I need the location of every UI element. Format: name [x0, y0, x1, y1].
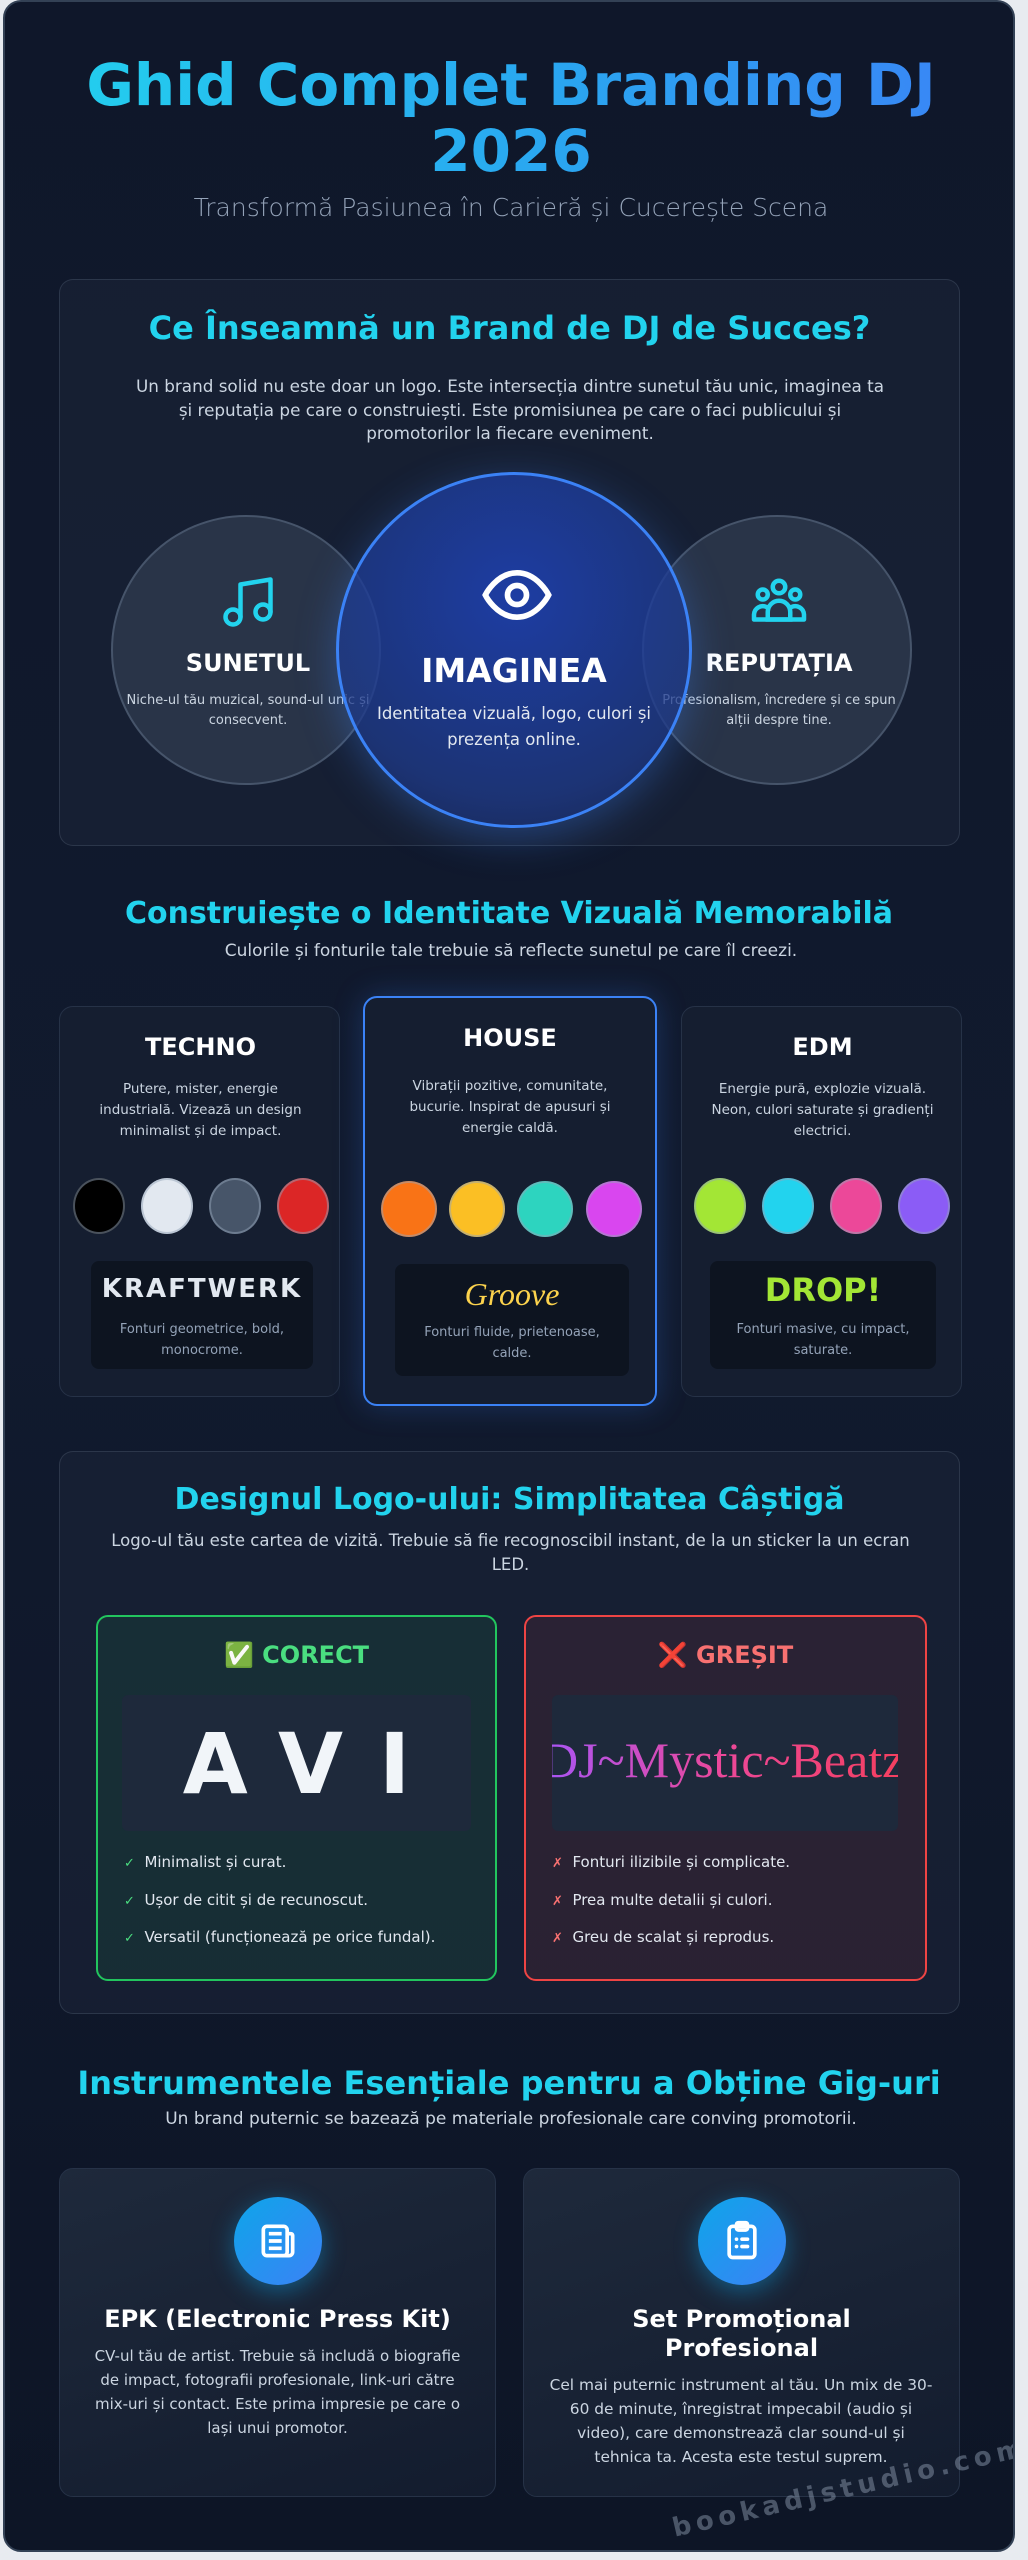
- heading: tools: Instrumentele Esențiale pentru a Obține Gig-uri: [77, 2064, 941, 2102]
- card: techno: TECHNO: [145, 1033, 256, 1061]
- circle: imaginea: [336, 472, 692, 828]
- card: house: HOUSE: [463, 1024, 557, 1052]
- font sample: DROP!: [765, 1271, 881, 1309]
- card: techno: [59, 1006, 340, 1397]
- panel: logo design: [59, 1451, 960, 2014]
- list: ✓ Ușor de citit și de recunoscut.: [124, 1891, 368, 1909]
- subheading: Logo-ul tău este cartea de vizită. Trebuie să fie recognoscibil instant, de la un sticker la un ecran LED.: [111, 1531, 910, 1574]
- font sample: [395, 1264, 629, 1376]
- icon: eye: [482, 570, 552, 620]
- font sample: [710, 1261, 936, 1369]
- list: ✓ Minimalist și curat.: [124, 1853, 286, 1871]
- icon: people: [752, 578, 806, 622]
- card: house: Vibrații pozitive, comunitate, bucurie. Inspirat de apusuri și energie caldă.: [409, 1078, 611, 1136]
- logo sample: messy: [552, 1695, 898, 1831]
- box: correct: ✅ CORECT: [224, 1641, 369, 1669]
- list: [552, 1853, 790, 1946]
- title: [5, 52, 1017, 184]
- logo sample: AVI: [122, 1695, 471, 1831]
- list: ✗ Fonturi ilizibile și complicate.: [552, 1853, 790, 1871]
- circle: imaginea: Identitatea vizuală, logo, culori și prezența online.: [377, 704, 651, 749]
- circle: reputatia: REPUTAȚIA: [705, 649, 853, 677]
- circle: imaginea: IMAGINEA: [421, 651, 607, 690]
- icon: music note: [223, 577, 273, 627]
- card: EPK: EPK (Electronic Press Kit): [104, 2305, 451, 2333]
- subtitle: Transformă Pasiunea în Carieră și Cucerește Scena: [194, 193, 828, 222]
- box: wrong: [524, 1615, 927, 1981]
- font sample: Fonturi geometrice, bold, monocrome.: [120, 1322, 284, 1358]
- swatches: [694, 1178, 950, 1234]
- circle: sunetul: [111, 515, 381, 785]
- icon: clipboard: [698, 2197, 786, 2285]
- card: promo set: [523, 2168, 960, 2497]
- box: wrong: ❌ GREȘIT: [658, 1641, 793, 1669]
- font sample: KRAFTWERK: [102, 1274, 302, 1304]
- card: promo set: Profesional: [665, 2334, 818, 2362]
- subheading: Un brand puternic se bazează pe materiale profesionale care conving promotorii.: [165, 2109, 857, 2129]
- card: edm: [681, 1006, 962, 1397]
- title: Ghid Complet Branding DJ: [86, 51, 936, 119]
- card: edm: Energie pură, explozie vizuală. Neon, culori saturate și gradienți electrici.: [712, 1081, 933, 1139]
- heading: Ce Înseamnă un Brand de DJ de Succes?: [149, 309, 870, 347]
- icon: newspaper: [234, 2197, 322, 2285]
- card: EPK: CV-ul tău de artist. Trebuie să includă o biografie de impact, fotografii profesionale, link-uri către mix-uri și contact. Este prima impresie pe care o lași unui promotor.: [95, 2347, 460, 2437]
- list: [124, 1853, 435, 1946]
- list: ✗ Prea multe detalii și culori.: [552, 1891, 772, 1909]
- swatches: [381, 1181, 642, 1237]
- circle: sunetul: Niche-ul tău muzical, sound-ul unic și consecvent.: [126, 693, 370, 728]
- circle: reputatia: [642, 515, 912, 785]
- intro text: Un brand solid nu este doar un logo. Este intersecția dintre sunetul tău unic, imaginea ta și reputația pe care o construiești. Este promisiunea pe care o faci publicului și promotorilor la fiecare eveniment.: [136, 376, 884, 443]
- card: techno: Putere, mister, energie industrială. Vizează un design minimalist și de impact.: [99, 1081, 302, 1139]
- logo sample: AVI: AVI: [183, 1715, 446, 1813]
- card: edm: EDM: [792, 1033, 853, 1061]
- card: promo set: Set Promoțional: [632, 2305, 851, 2333]
- font sample: Fonturi masive, cu impact, saturate.: [736, 1322, 910, 1358]
- swatches: [73, 1178, 329, 1234]
- heading: visual identity: Construiește o Identitate Vizuală Memorabilă: [125, 896, 893, 931]
- card: promo set: Cel mai puternic instrument al tău. Un mix de 30-60 de minute, înregistrat impecabil (audio și video), care demonstrează clar sound-ul și tehnica ta. Acesta este testul suprem.: [550, 2376, 932, 2466]
- font sample: [91, 1261, 313, 1369]
- heading: Designul Logo-ului: Simplitatea Câștigă: [175, 1482, 844, 1517]
- card: EPK: [59, 2168, 496, 2497]
- subheading: Culorile și fonturile tale trebuie să reflecte sunetul pe care îl creezi.: [225, 941, 797, 961]
- list: ✓ Versatil (funcționează pe orice fundal).: [124, 1928, 435, 1946]
- box: correct: [96, 1615, 497, 1981]
- card: house: [363, 996, 657, 1406]
- panel: brand definition: [59, 279, 960, 846]
- circle: reputatia: Profesionalism, încredere și ce spun alții despre tine.: [662, 693, 896, 728]
- title: 2026: [430, 117, 592, 185]
- circle: sunetul: SUNETUL: [186, 649, 310, 677]
- font sample: Fonturi fluide, prietenoase, calde.: [424, 1325, 600, 1361]
- list: ✗ Greu de scalat și reprodus.: [552, 1928, 774, 1946]
- font sample: Groove: [465, 1276, 559, 1312]
